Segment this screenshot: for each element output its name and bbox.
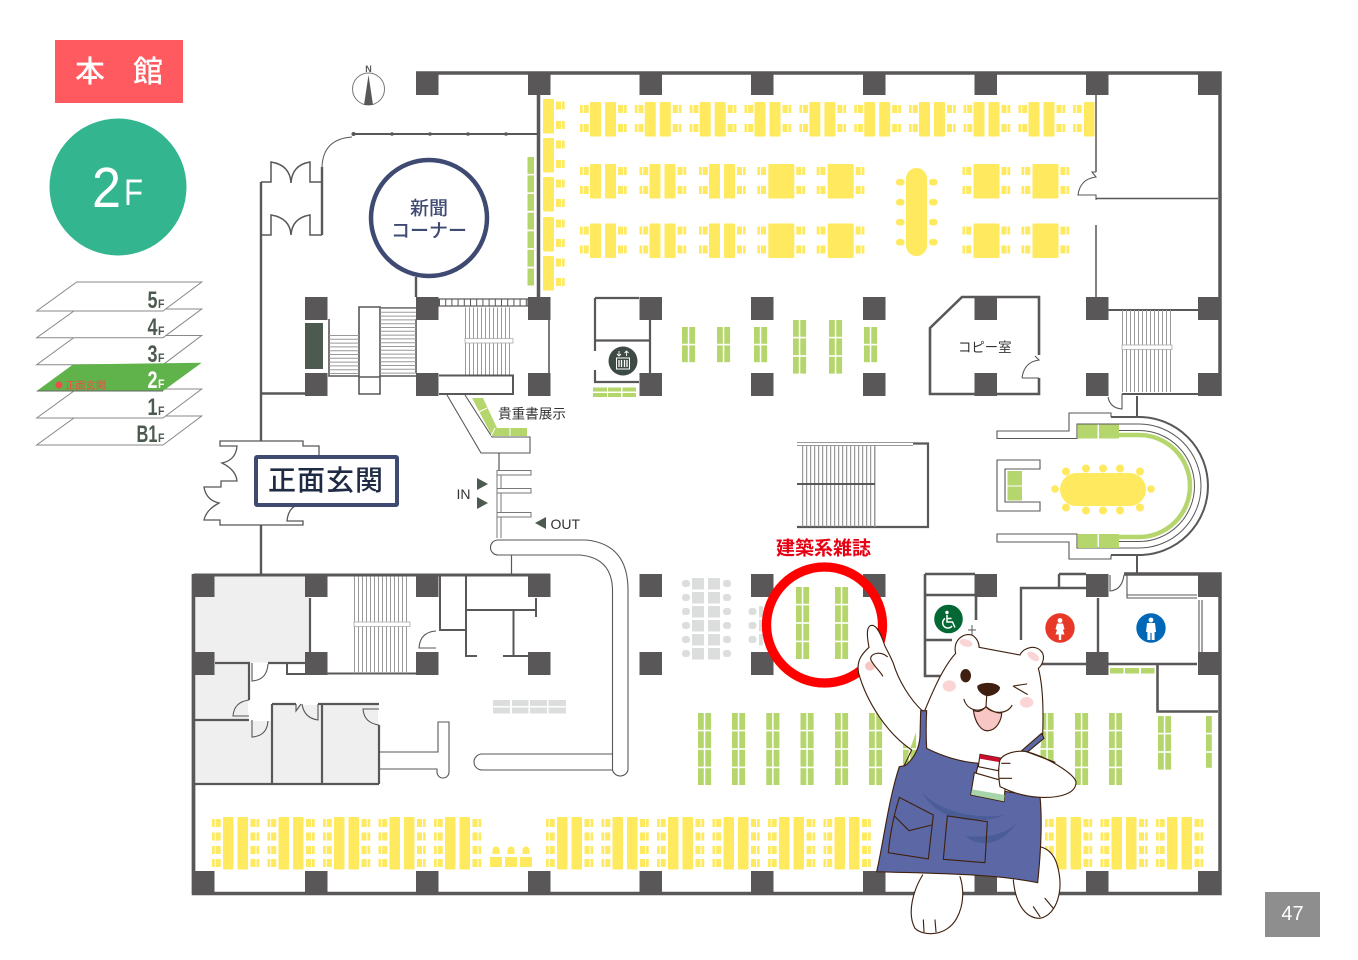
icon: women's toilet xyxy=(1045,613,1075,643)
room walls over grey fill xyxy=(194,574,379,894)
floor stack indicator: B1 xyxy=(136,421,158,448)
floor stack indicator: F xyxy=(158,351,164,365)
elevator icon xyxy=(608,346,638,376)
lower right rooms xyxy=(925,574,976,676)
floor stack indicator: F xyxy=(158,431,164,445)
front entrance label xyxy=(256,457,397,505)
bear legs xyxy=(911,847,1060,934)
floor stack indicator: F xyxy=(158,377,164,391)
bear mascot xyxy=(858,625,1076,934)
oval conference table xyxy=(1051,464,1155,514)
reading tables: bottom row xyxy=(212,817,1203,870)
floor badge: 2F xyxy=(50,118,186,256)
floor stack indicator xyxy=(37,282,202,448)
stairs xyxy=(344,302,1172,626)
entrance gates: IN xyxy=(456,486,470,502)
floor stack indicator: 5 xyxy=(148,287,158,314)
icon: accessible toilet xyxy=(934,605,963,633)
partition posts xyxy=(352,132,508,136)
compass xyxy=(352,64,384,105)
green shelves: lower rows xyxy=(698,668,1212,785)
front entrance outline xyxy=(204,441,319,525)
floor stack indicator: F xyxy=(158,404,164,418)
newspaper corner circle xyxy=(371,160,487,276)
red highlight circle xyxy=(766,567,882,683)
bear raised arm xyxy=(858,625,923,766)
bear head xyxy=(925,635,1043,773)
floor stack indicator: F xyxy=(158,324,164,338)
page number: 47 xyxy=(1281,903,1304,925)
floor stack indicator: 4 xyxy=(148,314,158,341)
floor badge: 2F: F xyxy=(124,172,143,213)
page number xyxy=(1265,892,1320,937)
entrance gates xyxy=(456,470,580,538)
green shelves: architecture magazines xyxy=(796,587,848,659)
newspaper corner circle: 新聞 xyxy=(410,198,448,220)
green shelf under elevator xyxy=(593,388,636,397)
rare book display: 貴重書展示 xyxy=(498,406,566,422)
label: copy room: コピー室 xyxy=(958,340,1012,355)
floor stack indicator: F xyxy=(158,297,164,311)
highlight label: 建築系雑誌 xyxy=(776,536,871,560)
floor stack indicator: 正面玄関 xyxy=(65,379,106,392)
front entrance label: 正面玄関 xyxy=(268,465,384,496)
heading: building name: 館 xyxy=(133,56,163,89)
apron xyxy=(877,711,1044,883)
grey back-of-house rooms xyxy=(195,576,378,783)
apse seminar area xyxy=(997,413,1208,559)
heading: building name xyxy=(55,40,183,103)
floor plan walls xyxy=(194,73,1220,894)
lower left xyxy=(287,663,416,674)
book rail xyxy=(474,540,628,776)
entrance gates: OUT xyxy=(550,516,580,532)
grey furniture: other collection xyxy=(493,578,763,714)
floor stack indicator: 2 xyxy=(148,367,158,394)
columns xyxy=(192,72,1220,894)
icon: men's toilet xyxy=(1136,613,1166,643)
compass: N xyxy=(365,64,372,74)
long table xyxy=(896,168,938,256)
floor stack indicator: 1 xyxy=(148,394,158,421)
center upper shelves xyxy=(682,320,877,374)
name badge xyxy=(971,754,1006,802)
newspaper corner circle: コーナー xyxy=(391,221,467,242)
floor stack indicator: 3 xyxy=(148,341,158,368)
bear hand on badge xyxy=(999,751,1076,797)
floor badge: 2F: 2 xyxy=(92,156,121,220)
reading tables: top rows xyxy=(543,99,1094,290)
green shelf: newspaper corner xyxy=(528,157,534,286)
heading: building name: 本 xyxy=(75,56,105,89)
rare book display xyxy=(447,395,566,453)
